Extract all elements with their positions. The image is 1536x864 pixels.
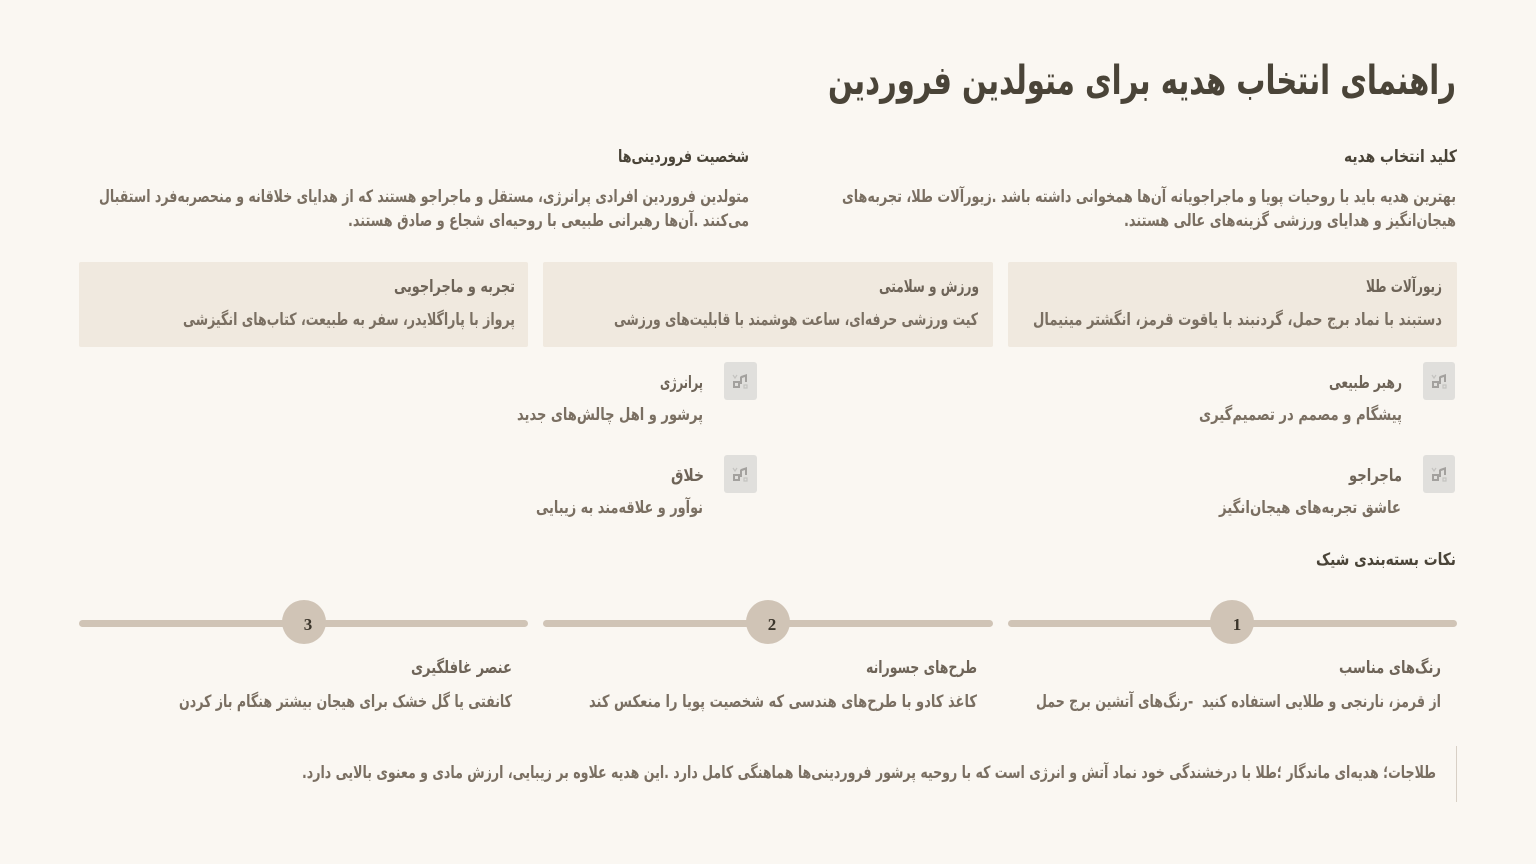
step 1: suitable colors: از قرمز، نارنجی و طلایی استفاده کنید -رنگ‌های آتشین برج حمل <box>1036 690 1441 712</box>
text block: farvardin personality: متولدین فروردین افرادی پرانرژی، مستقل و ماجراجو هستند که از هدایای خلاقانه و منحصربه‌فرد استقبال <box>99 187 749 207</box>
step 1: suitable colors: 1 <box>1233 615 1241 634</box>
icon: energetic <box>724 362 757 400</box>
step 1: suitable colors: رنگ‌های مناسب <box>1339 657 1441 678</box>
step 3: surprise element: 3 <box>304 615 312 634</box>
text block: gift selection key <box>842 185 1456 231</box>
icon: natural leader <box>1423 362 1455 400</box>
card: experience and adventure: پرواز با پاراگلایدر، سفر به طبیعت، کتاب‌های انگیزشی <box>183 309 515 330</box>
card: experience and adventure: تجربه و ماجراجویی <box>394 277 515 297</box>
step 3: surprise element: کانفتی یا گل خشک برای هیجان بیشتر هنگام باز کردن <box>179 691 512 712</box>
card: gold jewelry <box>1008 262 1457 347</box>
step 2: bold patterns <box>543 600 993 712</box>
trait: energetic <box>517 362 757 425</box>
trait: energetic: پرانرژی <box>660 373 703 393</box>
trait: creative: خلاق <box>671 466 704 486</box>
trait: natural leader: پیشگام و مصمم در تصمیم‌گیری <box>1199 404 1402 425</box>
card: sport and health <box>543 262 993 347</box>
card: sport and health: کیت ورزشی حرفه‌ای، ساعت هوشمند با قابلیت‌های ورزشی <box>614 310 978 330</box>
trait: creative <box>536 455 757 518</box>
card: gold jewelry: زیورآلات طلا <box>1366 275 1442 297</box>
trait: adventurer <box>1218 455 1455 518</box>
trait: natural leader <box>1199 362 1455 425</box>
icon: creative <box>724 455 757 493</box>
step 1: suitable colors <box>1008 600 1457 712</box>
trait: adventurer: عاشق تجربه‌های هیجان‌انگیز <box>1218 497 1401 518</box>
icon: adventurer <box>1423 455 1455 493</box>
step 2: bold patterns: طرح‌های جسورانه <box>866 658 977 678</box>
trait: creative: نوآور و علاقه‌مند به زیبایی <box>536 496 703 518</box>
step 3: surprise element: عنصر غافلگیری <box>411 657 512 678</box>
step 2: bold patterns: 2 <box>768 615 776 634</box>
trait: energetic: پرشور و اهل چالش‌های جدید <box>517 405 703 425</box>
panel: farvardin personality <box>99 147 749 231</box>
heading: farvardin personality: شخصیت فروردینی‌ها <box>618 147 749 167</box>
heading: packaging tips: نکات بسته‌بندی شیک <box>1316 550 1456 570</box>
step 3: surprise element <box>79 600 528 712</box>
card: experience and adventure <box>79 262 528 347</box>
card: sport and health: ورزش و سلامتی <box>879 277 979 297</box>
panel: gift selection key <box>842 147 1457 231</box>
trait: adventurer: ماجراجو <box>1348 466 1402 486</box>
heading: gift selection key: کلید انتخاب هدیه <box>1344 147 1457 167</box>
step 2: bold patterns: کاغذ کادو با طرح‌های هندسی که شخصیت پویا را منعکس کند <box>589 692 977 712</box>
text block: farvardin personality <box>99 187 749 231</box>
text block: farvardin personality: می‌کنند .آن‌ها رهبرانی طبیعی با روحیه‌ای شجاع و صادق هستند. <box>348 209 749 231</box>
trait: natural leader: رهبر طبیعی <box>1329 373 1402 393</box>
